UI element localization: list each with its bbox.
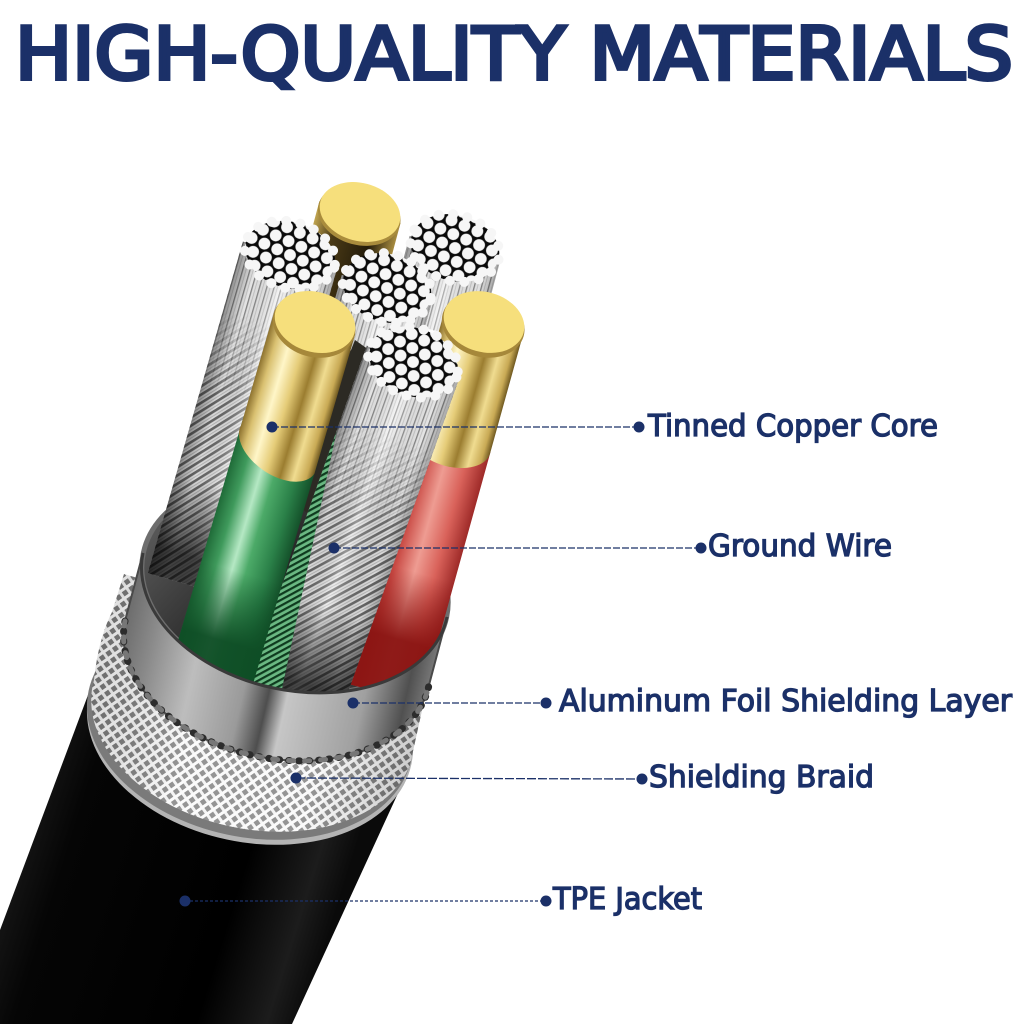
- rear left strand bundle: [148, 210, 346, 600]
- callout: tinned copper core: [266, 409, 938, 444]
- callout: aluminum foil shielding layer: Aluminum Foil Shielding Layer: [559, 684, 1013, 719]
- shielding braid: [91, 574, 432, 832]
- callout: TPE jacket: [180, 882, 702, 917]
- aluminum foil front band: [123, 553, 447, 761]
- callout: ground wire: [328, 529, 892, 564]
- callout: tinned copper core: Tinned Copper Core: [647, 409, 938, 444]
- rear gold conductor: [295, 173, 408, 315]
- callout: shielding braid: Shielding Braid: [649, 760, 874, 795]
- title: HIGH-QUALITY MATERIALS: [15, 12, 1013, 96]
- middle strand bundle: [312, 242, 442, 407]
- dark gap strands between bundles: [292, 340, 372, 520]
- callout: aluminum foil shielding layer: [348, 684, 1013, 719]
- rear right strand bundle: [388, 204, 509, 342]
- front strand bundle: [254, 323, 463, 692]
- aluminum foil rear interior: [122, 450, 468, 720]
- cable illustration: [0, 173, 532, 1024]
- callout: ground wire: Ground Wire: [708, 529, 892, 564]
- green wire with copper core: [169, 281, 364, 694]
- callout: shielding braid: [290, 760, 874, 795]
- TPE jacket: [0, 581, 435, 1024]
- red wire with copper core: [341, 282, 532, 704]
- callout: TPE jacket: TPE Jacket: [552, 882, 702, 917]
